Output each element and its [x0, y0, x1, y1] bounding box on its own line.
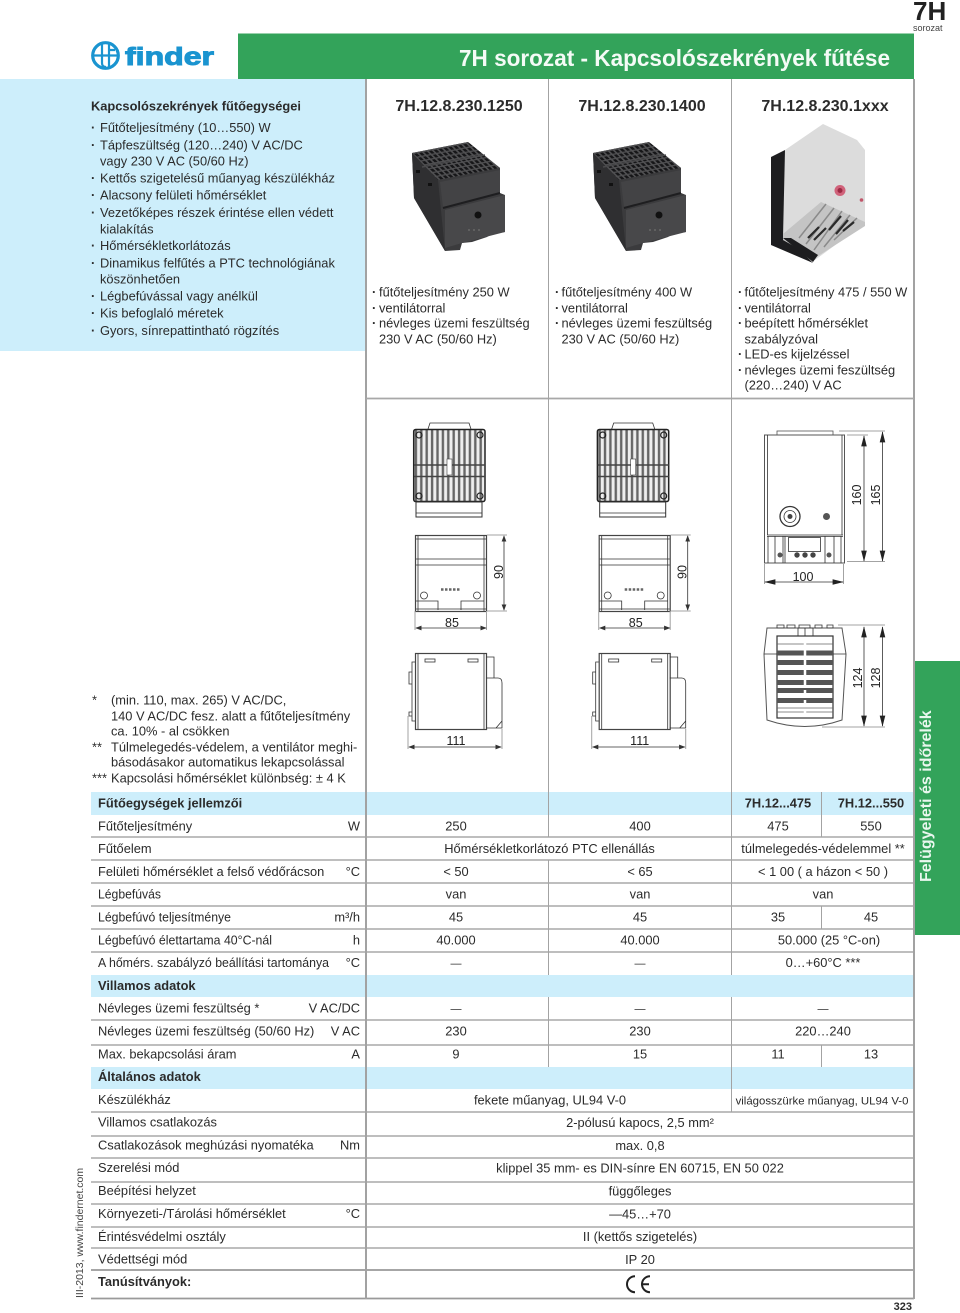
- text block: 1xxx specs: (220…240) V AC: [744, 378, 842, 392]
- row: Felületi hőmérséklet: °C: [346, 864, 360, 879]
- text block: 1xxx specs: ventilátorral: [744, 300, 811, 316]
- features list: Légbefúvással vagy anélkül: [100, 288, 258, 304]
- row: Felületi hőmérséklet: < 65: [627, 864, 653, 879]
- row: Tanúsítványok: [98, 1274, 650, 1292]
- page number: 323: [894, 1301, 912, 1313]
- row: Védettségi mód: IP 20: [625, 1252, 655, 1267]
- drawing: 1400 side view with dimension: [592, 654, 686, 749]
- row: Felületi hőmérséklet: Felületi hőmérséklet a felső védőrácson: [98, 864, 324, 879]
- row: Névleges üzemi feszültség: Névleges üzemi feszültség *: [98, 1000, 259, 1016]
- panel: features: [0, 79, 365, 351]
- row: Légbefúvás: Légbefúvás: [98, 886, 161, 902]
- row: Légbefúvás: van: [446, 886, 466, 902]
- features list: Kis befoglaló méretek: [100, 306, 224, 320]
- row: Védettségi mód: [98, 1252, 655, 1267]
- title banner: 7H sorozat - Kapcsolószekrények fűtése: [459, 45, 890, 71]
- drawing: 1xxx front view with dimensions: [764, 431, 885, 584]
- footnotes: (min. 110, max. 265) V AC/DC,: [111, 692, 286, 708]
- row: Felületi hőmérséklet: [98, 864, 888, 879]
- row: Készülékház: Készülékház: [98, 1092, 171, 1107]
- footnotes: **: [92, 740, 102, 754]
- row: Csatlakozások meghúzási nyomatéka: max. 0,8: [615, 1138, 665, 1153]
- footnotes: Túlmelegedés-védelem, a ventilátor meghi-: [111, 740, 357, 754]
- row: hőmérs. szabályzó: [98, 955, 860, 970]
- text block: 1xxx specs: szabályzóval: [744, 332, 818, 346]
- column heading: 1400: 7H.12.8.230.1400: [578, 98, 706, 115]
- row: hőmérs. szabályzó: —: [634, 958, 646, 970]
- row: Névleges üzemi feszültség: —: [818, 1004, 828, 1016]
- text block: 1400 specs: ·: [555, 316, 559, 330]
- row: Szerelési mód: [98, 1160, 784, 1176]
- row: Névleges üzemi feszültség: [98, 1000, 828, 1016]
- drawing: 1400 side view with dimension: 111: [630, 734, 649, 748]
- row: Légbefúvó élettartama: h: [353, 932, 360, 948]
- row: Készülékház: [98, 1092, 908, 1108]
- row: Légbefúvó élettartama: 40.000: [436, 932, 476, 948]
- features list: ·: [91, 306, 95, 320]
- features list: Gyors, sínrepattintható rögzítés: [100, 323, 279, 338]
- drawing: 1250 front view with dimensions: 85: [445, 616, 459, 630]
- photo: black heater 1250: [412, 142, 505, 251]
- row: Légbefúvó teljesítménye: 35: [771, 910, 785, 924]
- row: Légbefúvás: van: [630, 886, 650, 902]
- row: Fűtőteljesítmény: [98, 818, 882, 834]
- imprint: III-2013, www.findernet.com: [74, 1168, 86, 1298]
- features list: kialakítás: [100, 222, 154, 236]
- row: hőmérs. szabályzó: A hőmérs. szabályzó beállítási tartománya: [98, 955, 330, 970]
- row: Névleges üzemi feszültség 50/60: V AC: [331, 1024, 360, 1038]
- row: Légbefúvó teljesítménye: [98, 910, 878, 924]
- features list: ·: [91, 138, 95, 152]
- row: Fűtőteljesítmény: Fűtőteljesítmény: [98, 818, 193, 834]
- text block: 1xxx specs: beépített hőmérséklet: [744, 316, 868, 330]
- text block: 1xxx specs: névleges üzemi feszültség: [744, 362, 895, 378]
- row: Légbefúvó teljesítménye: Légbefúvó teljesítménye: [98, 910, 231, 924]
- text block: 1250 specs: ·: [372, 284, 376, 300]
- drawing: 1xxx bottom view with dimensions: 128: [869, 668, 883, 688]
- text block: 1400 specs: fűtőteljesítmény 400 W: [562, 284, 693, 300]
- row: Névleges üzemi feszültség: —: [450, 1004, 462, 1016]
- row: Csatlakozások meghúzási nyomatéka: [98, 1138, 665, 1153]
- features list: ·: [91, 238, 95, 253]
- features list: Tápfeszültség (120…240) V AC/DC: [100, 138, 303, 152]
- row: Villamos csatlakozás: [98, 1114, 715, 1130]
- row: Szerelési mód: klippel 35 mm- es DIN-sínre EN 60715, EN 50 022: [496, 1160, 784, 1176]
- logo: finder: [92, 43, 214, 71]
- row: Fűtőelem: Hőmérsékletkorlátozó PTC ellenállás: [444, 841, 655, 856]
- footnotes: ca. 10% - al csökken: [111, 724, 230, 738]
- drawing: 1xxx front view with dimensions: 100: [793, 570, 813, 584]
- row: Készülékház: fekete műanyag, UL94 V-0: [474, 1092, 626, 1108]
- icon: CE mark: [627, 1276, 650, 1292]
- row: Fűtőteljesítmény: 400: [629, 818, 651, 834]
- row: Max. bekapcsolási áram: 11: [771, 1046, 785, 1062]
- text block: 1400 specs: [555, 284, 712, 346]
- row: Légbefúvás: van: [813, 886, 833, 902]
- row: Környezeti hőmérséklet: —45…+70: [609, 1206, 671, 1222]
- features list: ·: [91, 288, 95, 304]
- text block: 1250 specs: névleges üzemi feszültség: [379, 316, 530, 330]
- photo: grey heater 1xxx: [771, 124, 865, 263]
- text block: 1xxx specs: ·: [738, 346, 742, 362]
- row: Névleges üzemi feszültség 50/60: 230: [629, 1024, 651, 1038]
- text block: 1400 specs: ventilátorral: [562, 300, 628, 316]
- footnotes: 140 V AC/DC fesz. alatt a fűtőteljesítmény: [111, 708, 351, 724]
- row: hőmérs. szabályzó: —: [450, 958, 462, 970]
- row: Fűtőteljesítmény: 250: [445, 818, 467, 834]
- row: Fűtőelem: túlmelegedés-védelemmel **: [741, 841, 905, 856]
- row: Beépítési helyzet: Beépítési helyzet: [98, 1183, 196, 1198]
- features list: ·: [91, 188, 95, 202]
- footnotes: [92, 692, 357, 786]
- series tag: 7H sorozat: sorozat: [913, 23, 943, 33]
- row: Beépítési helyzet: függőleges: [609, 1184, 671, 1198]
- features list: köszönhetően: [100, 272, 180, 286]
- table and column rules: [91, 79, 914, 1299]
- row: Érintésvédelmi osztály: II (kettős szigetelés): [583, 1229, 697, 1244]
- row: Védettségi mód: Védettségi mód: [98, 1252, 187, 1266]
- row: Névleges üzemi feszültség 50/60: 220…240: [795, 1024, 851, 1038]
- text block: 1400 specs: névleges üzemi feszültség: [562, 316, 712, 330]
- text block: 1xxx specs: [738, 284, 908, 392]
- drawing: 1250 front view with dimensions: [415, 535, 507, 630]
- footnotes: *: [92, 692, 97, 708]
- features heading: Kapcsolószekrények fűtőegységei: [91, 98, 301, 114]
- column heading: 1250: 7H.12.8.230.1250: [395, 98, 523, 115]
- row: Tanúsítványok: Tanúsítványok:: [98, 1274, 191, 1289]
- text block: 1250 specs: ·: [372, 300, 376, 316]
- row: Villamos csatlakozás: 2-pólusú kapocs, 2,5 mm²: [566, 1115, 715, 1130]
- features list: ·: [91, 323, 95, 338]
- row: Max. bekapcsolási áram: Max. bekapcsolási áram: [98, 1046, 236, 1062]
- features list: Hőmérsékletkorlátozás: [100, 238, 231, 253]
- footnotes: ***: [92, 770, 107, 786]
- row: Légbefúvó teljesítménye: 45: [864, 910, 878, 924]
- row: hőmérs. szabályzó: 0…+60°C ***: [786, 955, 860, 970]
- section heading: Fűtőegységek jellemzői: [98, 796, 242, 810]
- text block: 1xxx specs: fűtőteljesítmény 475 / 550 W: [744, 284, 908, 300]
- table section bands: [91, 792, 913, 1089]
- text block: 1400 specs: ·: [555, 284, 559, 300]
- drawing: 1250 side view with dimension: [408, 654, 502, 749]
- row: Csatlakozások meghúzási nyomatéka: Csatlakozások meghúzási nyomatéka: [98, 1138, 314, 1152]
- features list: ·: [91, 205, 95, 220]
- row: Légbefúvó élettartama: Légbefúvó élettartama 40°C-nál: [98, 932, 272, 948]
- drawing: 1xxx front view with dimensions: 165: [869, 485, 883, 505]
- section heading: Villamos adatok: [98, 978, 196, 993]
- subcolumn headers: 7H.12...475: [745, 796, 811, 810]
- row: Légbefúvó élettartama: 50.000 (25 °C-on): [778, 932, 880, 948]
- row: Környezeti hőmérséklet: °C: [346, 1206, 360, 1221]
- row: Villamos csatlakozás: Villamos csatlakozás: [98, 1114, 217, 1130]
- drawing: 1xxx bottom view with dimensions: 124: [851, 668, 865, 688]
- row: Max. bekapcsolási áram: 13: [864, 1046, 878, 1062]
- row: Környezeti hőmérséklet: [98, 1206, 671, 1222]
- drawing: 1xxx bottom view with dimensions: [764, 625, 885, 727]
- text block: 1xxx specs: LED-es kijelzéssel: [744, 346, 849, 362]
- row: Légbefúvó teljesítménye: m³/h: [334, 910, 360, 924]
- table section: Általános adatok: [98, 1069, 908, 1292]
- text block: 1xxx specs: ·: [738, 362, 742, 378]
- text block: 1250 specs: ·: [372, 316, 376, 330]
- row: Csatlakozások meghúzási nyomatéka: Nm: [340, 1138, 360, 1152]
- text block: 1xxx specs: ·: [738, 284, 742, 300]
- row: Érintésvédelmi osztály: [98, 1229, 697, 1244]
- features list: ·: [91, 120, 95, 135]
- text block: 1400 specs: ·: [555, 300, 559, 316]
- drawing: 1400 front view with dimensions: 90: [676, 565, 690, 579]
- footnotes: Kapcsolási hőmérséklet különbség: ± 4 K: [111, 770, 346, 786]
- column heading: 1xxx: 7H.12.8.230.1xxx: [761, 98, 889, 115]
- table section: Villamos adatok: [98, 978, 878, 1062]
- row: Fűtőteljesítmény: W: [348, 818, 361, 834]
- features list: [91, 120, 335, 338]
- features list: Vezetőképes részek érintése ellen védett: [100, 205, 334, 220]
- row: Beépítési helyzet: [98, 1183, 671, 1198]
- text block: 1250 specs: ventilátorral: [379, 300, 445, 316]
- features list: Dinamikus felfűtés a PTC technológiának: [100, 256, 335, 270]
- row: Névleges üzemi feszültség 50/60: 230: [445, 1024, 467, 1038]
- row: Szerelési mód: Szerelési mód: [98, 1160, 179, 1175]
- drawing: 1250 front view with dimensions: 90: [492, 565, 506, 579]
- footnotes: básodásakor automatikus lekapcsolással: [111, 754, 344, 770]
- row: Felületi hőmérséklet: < 50: [443, 864, 469, 879]
- features list: Alacsony felületi hőmérséklet: [100, 188, 267, 202]
- row: Max. bekapcsolási áram: [98, 1046, 878, 1062]
- features list: Kettős szigetelésű műanyag készülékház: [100, 170, 335, 186]
- drawing: 1400 top view: [597, 423, 669, 517]
- text block: 1250 specs: [372, 284, 530, 346]
- row: Fűtőteljesítmény: 550: [860, 818, 882, 834]
- row: Készülékház: világosszürke műanyag, UL94 V-0: [736, 1096, 908, 1108]
- section heading: Általános adatok: [98, 1069, 202, 1084]
- row: Fűtőelem: [98, 841, 905, 856]
- drawing: 1xxx front view with dimensions: 160: [850, 485, 864, 505]
- row: Érintésvédelmi osztály: Érintésvédelmi osztály: [98, 1229, 226, 1244]
- text block: 1xxx specs: ·: [738, 300, 742, 316]
- row: Légbefúvó teljesítménye: 45: [633, 910, 647, 924]
- features list: ·: [91, 170, 95, 186]
- row: hőmérs. szabályzó: °C: [346, 955, 360, 970]
- side tab: category: [914, 661, 960, 935]
- drawing: 1250 side view with dimension: 111: [446, 734, 466, 748]
- subcolumn headers: [745, 796, 904, 810]
- row: Névleges üzemi feszültség 50/60: [98, 1024, 851, 1038]
- subcolumn headers: 7H.12...550: [838, 796, 904, 810]
- row: Max. bekapcsolási áram: 15: [633, 1046, 647, 1062]
- drawing: 1400 front view with dimensions: [599, 535, 691, 630]
- table section: Fűtőegységek jellemzői: [98, 796, 905, 970]
- row: Környezeti hőmérséklet: Környezeti-/Tárolási hőmérséklet: [98, 1206, 286, 1221]
- row: Névleges üzemi feszültség: —: [634, 1004, 646, 1016]
- logo: finder: finder: [125, 43, 214, 71]
- row: Fűtőteljesítmény: 475: [767, 818, 789, 834]
- features list: ·: [91, 256, 95, 270]
- row: Felületi hőmérséklet: < 1 00 ( a házon < 50 ): [758, 864, 888, 879]
- text block: 1250 specs: 230 V AC (50/60 Hz): [379, 332, 497, 346]
- photo: black heater 1400: [593, 142, 686, 251]
- row: Max. bekapcsolási áram: 9: [452, 1046, 460, 1062]
- row: Légbefúvó teljesítménye: 45: [449, 910, 463, 924]
- row: Névleges üzemi feszültség 50/60: Névleges üzemi feszültség (50/60 Hz): [98, 1024, 314, 1038]
- row: Légbefúvó élettartama: 40.000: [620, 932, 660, 948]
- text block: 1400 specs: 230 V AC (50/60 Hz): [562, 332, 679, 346]
- drawing: 1400 front view with dimensions: 85: [629, 616, 643, 630]
- row: Fűtőelem: Fűtőelem: [98, 841, 152, 856]
- text block: 1xxx specs: ·: [738, 316, 742, 330]
- features list: vagy 230 V AC (50/60 Hz): [100, 154, 248, 168]
- row: Max. bekapcsolási áram: A: [351, 1046, 360, 1062]
- title banner: [238, 34, 914, 79]
- row: Légbefúvás: [98, 886, 833, 902]
- features list: Fűtőteljesítmény (10…550) W: [100, 120, 271, 135]
- row: Névleges üzemi feszültség: V AC/DC: [309, 1000, 360, 1016]
- drawing: 1250 top view: [414, 423, 485, 517]
- text block: 1250 specs: fűtőteljesítmény 250 W: [379, 284, 511, 300]
- row: Légbefúvó élettartama: [98, 932, 880, 948]
- side tab: category: Felügyeleti és időrelék: [918, 710, 935, 882]
